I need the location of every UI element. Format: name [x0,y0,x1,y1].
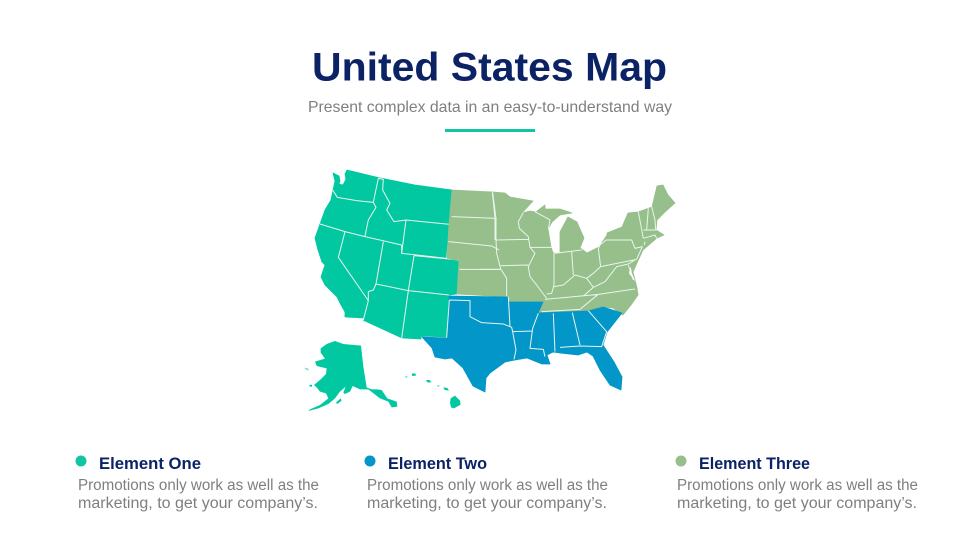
legend dot [364,456,376,466]
title: United States Map [312,46,667,90]
legend: Element Two [364,455,608,512]
description: marketing, to get your company’s. [677,495,917,512]
region: northern and eastern states [447,185,675,315]
legend dot [76,456,86,466]
region: western states [315,170,459,339]
description: marketing, to get your company’s. [367,495,607,512]
description: Promotions only work as well as the [677,477,918,494]
map: United States [304,170,675,411]
legend dot [676,456,686,466]
region: southern states [422,296,622,392]
heading: Element One [99,455,201,473]
description: Promotions only work as well as the [367,477,608,494]
title underline [445,129,535,132]
region: Hawaii [405,373,461,408]
description: marketing, to get your company’s. [78,495,318,512]
legend: Element One [76,455,319,512]
legend: Element Three [676,455,918,512]
subtitle: Present complex data in an easy-to-understand way [308,99,672,116]
heading: Element Two [388,455,487,473]
region: Alaska [304,341,397,411]
description: Promotions only work as well as the [78,477,319,494]
heading: Element Three [699,455,810,473]
